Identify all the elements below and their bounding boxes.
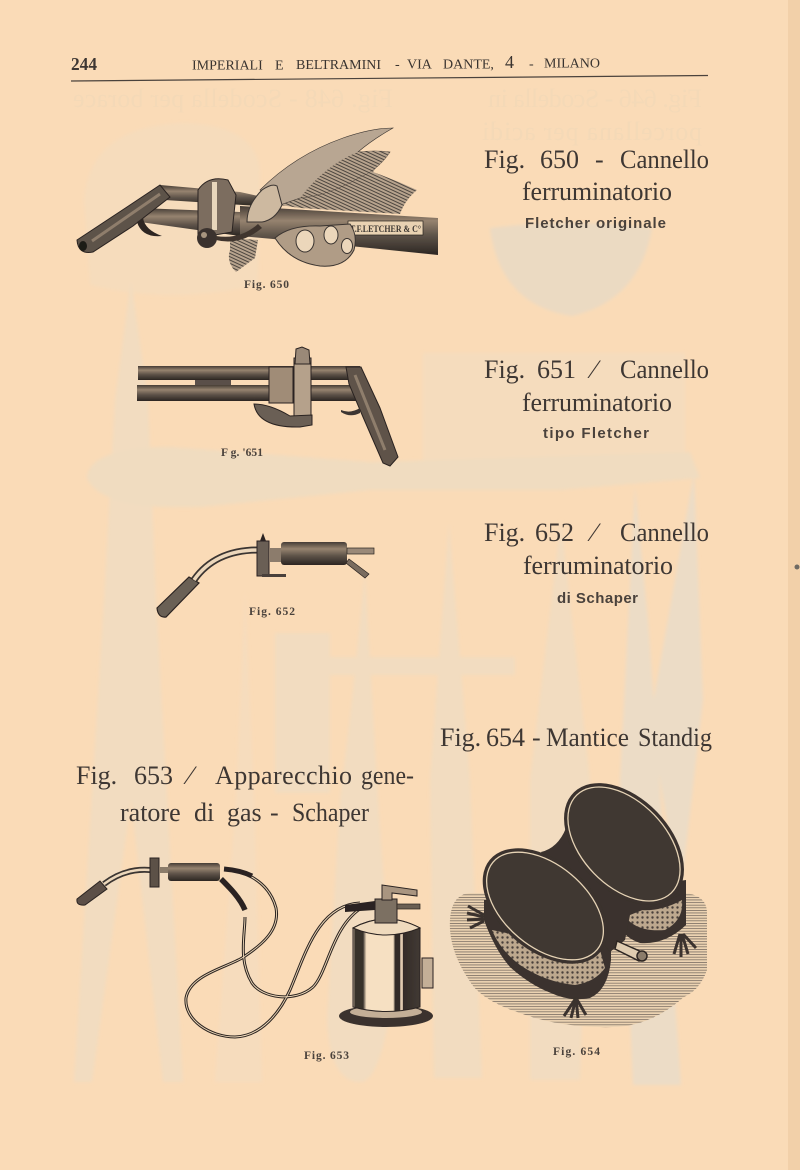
heading: Fig. 654: Standig bbox=[638, 723, 712, 752]
text block: Fig. 653 description: di bbox=[194, 798, 214, 827]
heading: Fig. 654: - bbox=[532, 723, 541, 752]
caption Fig. 650: Fig. 650 bbox=[244, 279, 289, 291]
heading: Fig. 654: Fig. bbox=[440, 723, 481, 752]
right bellows body bbox=[615, 880, 686, 943]
thumb bbox=[247, 185, 282, 222]
text block: Fig. 652 description: ferruminatorio bbox=[523, 551, 673, 580]
text block: Fig. 652 description: Cannello bbox=[620, 518, 709, 547]
lever hanging bbox=[229, 238, 258, 272]
gas hoses bbox=[186, 870, 363, 1037]
left bellows body bbox=[484, 900, 611, 999]
illustration: Fig. 654 Standig bellows bbox=[450, 760, 707, 1027]
body bbox=[281, 542, 347, 565]
running title: IMPERIALI bbox=[192, 58, 263, 74]
torch clamp bbox=[150, 858, 159, 887]
illustration: Fig. 650 torch held in hand: T.F.LETCHER & C° bbox=[350, 224, 421, 235]
running title: MILANO bbox=[544, 56, 600, 72]
tank base bbox=[339, 1005, 433, 1027]
fingers bbox=[275, 224, 355, 266]
trigger bbox=[341, 408, 360, 415]
caption Fig. 654: Fig. 654 bbox=[553, 1046, 600, 1058]
text block: Fig. 652 description: di Schaper bbox=[557, 590, 638, 607]
tubes right bbox=[240, 206, 438, 255]
curved tube bbox=[194, 550, 258, 580]
ghost mirrored text from the reverse page: Fig. 646 - Scodella in bbox=[488, 84, 702, 113]
thick hose ends bbox=[224, 869, 252, 876]
text block: Fig. 650 description: 650 bbox=[540, 145, 579, 174]
text block: Fig. 653 description: gene- bbox=[361, 761, 414, 790]
running title: BELTRAMINI bbox=[296, 58, 381, 73]
text block: Fig. 653 description: ratore bbox=[120, 798, 181, 827]
text block: Fig. 653 description: - bbox=[270, 798, 279, 827]
text block: Fig. 652 description bbox=[484, 518, 709, 607]
elbow and nozzle bbox=[346, 367, 398, 466]
outlet nozzle bbox=[615, 941, 644, 961]
ghost: columns bbox=[215, 593, 262, 1082]
text block: Fig. 651 description: ⁄ bbox=[587, 355, 601, 384]
text block: Fig. 653 description: Fig. bbox=[76, 761, 117, 790]
torch nozzle bbox=[77, 881, 107, 905]
lion foot bottom bbox=[564, 998, 586, 1018]
page number: 244 bbox=[71, 54, 97, 74]
text block: Fig. 651 description: ferruminatorio bbox=[522, 388, 672, 417]
ghost mirrored text from the reverse page: porcellana per acidi bbox=[482, 117, 702, 146]
text block: Fig. 650 description: Cannello bbox=[620, 145, 709, 174]
torch body bbox=[168, 863, 220, 881]
running title: E bbox=[275, 58, 284, 74]
hose connectors bbox=[347, 548, 374, 554]
tank valve head bbox=[375, 899, 397, 923]
bellows waist bbox=[541, 828, 680, 952]
lion foot left bbox=[467, 906, 484, 928]
ghost: saw band bbox=[87, 447, 700, 507]
text block: Fig. 653 description: Schaper bbox=[292, 798, 369, 827]
ghost mirrored text from the reverse page: Fig. 648 - Scodella per borace bbox=[73, 84, 393, 113]
text block: Fig. 653 description bbox=[76, 761, 414, 827]
caption Fig. 652: Fig. 652 bbox=[249, 606, 295, 618]
illustration: Fig. 653 gas generator with torch bbox=[77, 858, 433, 1037]
text block: Fig. 650 description bbox=[484, 145, 709, 232]
tube left lower bbox=[140, 208, 240, 236]
caption Fig. 651: F g. '651 bbox=[221, 447, 263, 459]
nozzle grip bbox=[157, 577, 199, 617]
tank body bbox=[353, 919, 420, 1012]
text block: Fig. 651 description: 651 bbox=[537, 355, 576, 384]
lever bbox=[254, 404, 312, 427]
tubes bbox=[138, 366, 360, 380]
clamp bbox=[198, 179, 236, 238]
ghost: blob top left bbox=[84, 123, 260, 295]
hand wing bbox=[260, 128, 393, 205]
running title: 4 bbox=[505, 52, 514, 72]
text block: Fig. 653 description: ⁄ bbox=[183, 761, 197, 790]
illustration: Fig. 651 torch bbox=[137, 347, 398, 466]
front oval leather top bbox=[461, 825, 629, 987]
hand shadow bbox=[280, 151, 417, 214]
show-through ghost image from the reverse page bbox=[74, 123, 703, 1085]
heading: Fig. 654: 654 bbox=[486, 723, 525, 752]
text block: Fig. 651 description: tipo Fletcher bbox=[543, 425, 649, 442]
text block: Fig. 652 description: ⁄ bbox=[587, 518, 601, 547]
nozzle bbox=[77, 185, 170, 252]
maker plate bbox=[348, 221, 423, 235]
running title: - bbox=[395, 58, 400, 72]
running title: DANTE, bbox=[443, 58, 494, 72]
text block: Fig. 650 description: Fig. bbox=[484, 145, 525, 174]
trigger bbox=[137, 218, 162, 236]
back oval leather top bbox=[541, 760, 707, 928]
text block: Fig. 651 description: Fig. bbox=[484, 355, 525, 384]
text block: Fig. 652 description: Fig. bbox=[484, 518, 525, 547]
tube left upper bbox=[160, 185, 258, 206]
running title: VIA bbox=[407, 58, 433, 72]
heading: Fig. 654 bbox=[440, 723, 712, 752]
illustration: Fig. 650 torch held in hand bbox=[77, 128, 438, 272]
ghost: tongs bbox=[74, 280, 183, 1082]
running title: - bbox=[529, 57, 534, 72]
text block: Fig. 651 description: Cannello bbox=[620, 355, 709, 384]
text block: Fig. 651 description bbox=[484, 355, 709, 442]
heading: Fig. 654: Mantice bbox=[546, 723, 629, 752]
lion foot right bbox=[674, 934, 696, 957]
text block: Fig. 653 description: Apparecchio bbox=[215, 761, 352, 790]
clamp bbox=[257, 541, 269, 576]
side gauge bbox=[422, 958, 433, 988]
text block: Fig. 650 description: - bbox=[595, 145, 604, 174]
text block: Fig. 650 description: Fletcher originale bbox=[525, 215, 666, 232]
page header bbox=[71, 52, 708, 81]
text block: Fig. 650 description: ferruminatorio bbox=[522, 177, 672, 206]
caption Fig. 653: Fig. 653 bbox=[304, 1050, 349, 1062]
text block: Fig. 653 description: gas bbox=[227, 798, 262, 827]
illustration: Fig. 652 torch bbox=[157, 533, 374, 617]
striped floor shadow bbox=[450, 893, 707, 1027]
text block: Fig. 652 description: 652 bbox=[535, 518, 574, 547]
clamp bbox=[269, 367, 293, 403]
text block: Fig. 653 description: 653 bbox=[134, 761, 173, 790]
ghost: bowl bbox=[490, 223, 652, 316]
torch tube bbox=[104, 870, 150, 884]
ghost: block bbox=[423, 353, 685, 468]
ghost mirrored text from the reverse page bbox=[73, 84, 702, 146]
